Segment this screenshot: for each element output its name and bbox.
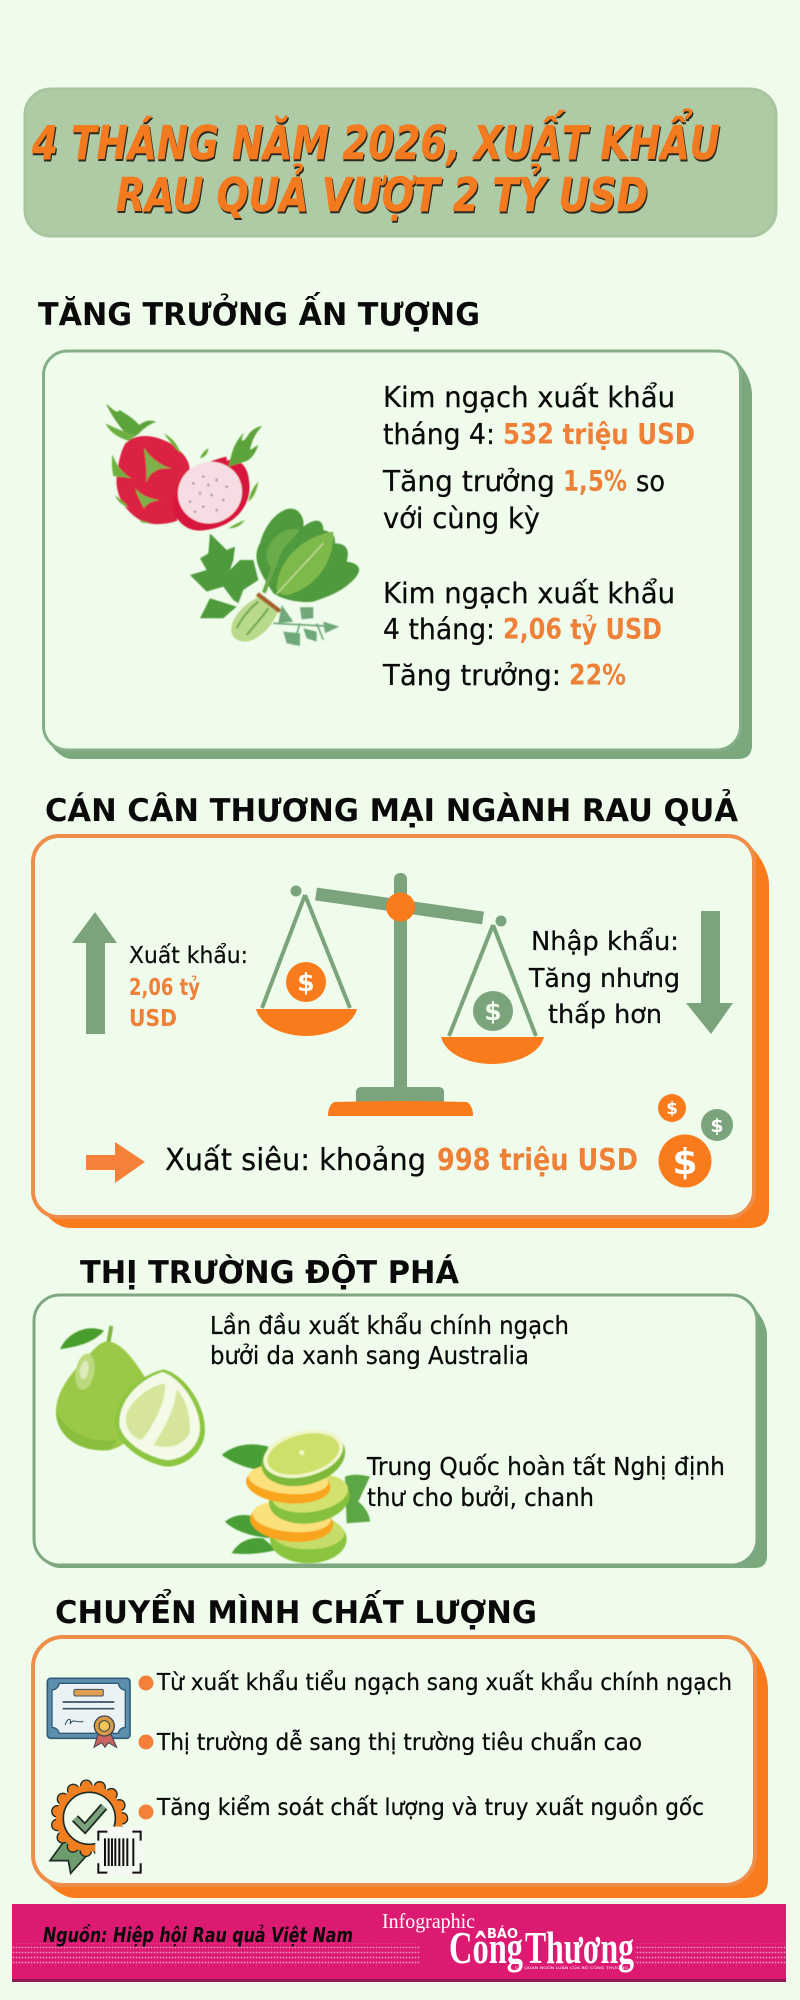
- logo: Báo Công Thương: Thương: [525, 1922, 634, 1973]
- icon: right arrow: [86, 1142, 145, 1183]
- panel: quality: [33, 1637, 768, 1898]
- text: April export: so: [636, 465, 665, 498]
- text: four-month export: 4 tháng:: [383, 613, 495, 646]
- bullet 2: Thị trường dễ sang thị trường tiêu chuẩn cao: [156, 1728, 642, 1756]
- icon: green dollar coin: $: [484, 997, 502, 1026]
- icon: citrus slices: [222, 1422, 370, 1563]
- icon: coin pile: $: [672, 1142, 698, 1183]
- text: trade surplus: 998 triệu USD: [437, 1143, 638, 1178]
- icon: coin pile: $: [666, 1099, 678, 1119]
- text: four-month export: 2,06 tỷ USD: [503, 613, 662, 646]
- text: April export: tháng 4:: [383, 418, 495, 451]
- panel: trade balance: [33, 836, 769, 1228]
- bullet list: [138, 1670, 732, 1821]
- text: April export: Tăng trưởng: [382, 465, 555, 498]
- icon: certificate: [47, 1678, 130, 1747]
- icon: green dollar coin: [473, 991, 513, 1031]
- text: import note: Tăng nhưng: [528, 964, 680, 994]
- logo: Báo Công Thương: Infographic: [382, 1909, 475, 1933]
- heading: quality: CHUYỂN MÌNH CHẤT LƯỢNG: [55, 1590, 537, 1631]
- title banner: [25, 89, 776, 236]
- heading: markets: THỊ TRƯỜNG ĐỘT PHÁ: [80, 1254, 459, 1291]
- text: April export: [382, 381, 695, 535]
- logo: Báo Công Thương: Công: [449, 1922, 523, 1973]
- text: China: [366, 1452, 725, 1512]
- text: four-month export: 22%: [569, 659, 626, 692]
- text: four-month export: Tăng trưởng:: [382, 659, 561, 692]
- text: China: Trung Quốc hoàn tất Nghị định: [366, 1452, 725, 1481]
- text: Australia: bưởi da xanh sang Australia: [210, 1341, 529, 1370]
- panel: growth: [44, 351, 752, 759]
- footer banner: [12, 1904, 786, 1982]
- icon: leafy vegetables: [190, 509, 359, 646]
- logo: Báo Công Thương: CƠ QUAN NGÔN LUẬN CỦA BỘ CÔNG THƯƠNG: [515, 1965, 628, 1970]
- text: Australia: Lần đầu xuất khẩu chính ngạch: [210, 1311, 569, 1340]
- icon: coin pile: [658, 1094, 733, 1188]
- icon: quality badge with barcode: [50, 1785, 144, 1877]
- text: import note: [528, 926, 680, 1030]
- title text: [31, 108, 720, 222]
- text: April export: với cùng kỳ: [383, 502, 540, 535]
- text: import note: Nhập khẩu:: [531, 926, 679, 957]
- panel: markets: [34, 1295, 767, 1568]
- icon: coin pile: $: [710, 1115, 724, 1137]
- icon: export up arrow: [72, 912, 117, 1034]
- heading: trade balance: CÁN CÂN THƯƠNG MẠI NGÀNH RAU QUẢ: [45, 790, 738, 829]
- text: export value: [129, 943, 248, 1032]
- title text: RAU QUẢ VƯỢT 2 TỶ USD: [116, 163, 648, 222]
- source text: Nguồn: Hiệp hội Rau quả Việt Nam: [43, 1923, 353, 1947]
- text: April export: Kim ngạch xuất khẩu: [383, 381, 675, 414]
- text: export value: Xuất khẩu:: [129, 943, 248, 969]
- text: trade surplus: [165, 1143, 638, 1178]
- text: import note: thấp hơn: [548, 1000, 662, 1030]
- bullet 3: Tăng kiểm soát chất lượng và truy xuất nguồn gốc: [156, 1795, 704, 1821]
- text: China: thư cho bưởi, chanh: [367, 1483, 594, 1512]
- text: April export: 532 triệu USD: [503, 418, 695, 451]
- icon: dragon fruit: [106, 403, 262, 533]
- icon: balance scale: [256, 873, 544, 1116]
- icon: orange dollar coin: $: [297, 968, 315, 997]
- text: trade surplus: Xuất siêu: khoảng: [165, 1143, 426, 1178]
- bullet 1: Từ xuất khẩu tiểu ngạch sang xuất khẩu chính ngạch: [156, 1670, 732, 1696]
- icon: pomelo: [56, 1326, 205, 1467]
- text: April export: 1,5%: [563, 465, 627, 498]
- text: Australia: [210, 1311, 569, 1370]
- text: export value: USD: [129, 1006, 177, 1032]
- text: export value: 2,06 tỷ: [129, 975, 200, 1001]
- logo: Báo Công Thương: BÁO: [487, 1926, 518, 1942]
- icon: orange dollar coin: [286, 962, 326, 1002]
- logo: Báo Công Thương: [382, 1909, 634, 1973]
- icon: import down arrow: [686, 911, 733, 1034]
- text: four-month export: [382, 577, 675, 692]
- heading: growth: TĂNG TRƯỞNG ẤN TƯỢNG: [38, 293, 480, 333]
- text: four-month export: Kim ngạch xuất khẩu: [383, 577, 675, 610]
